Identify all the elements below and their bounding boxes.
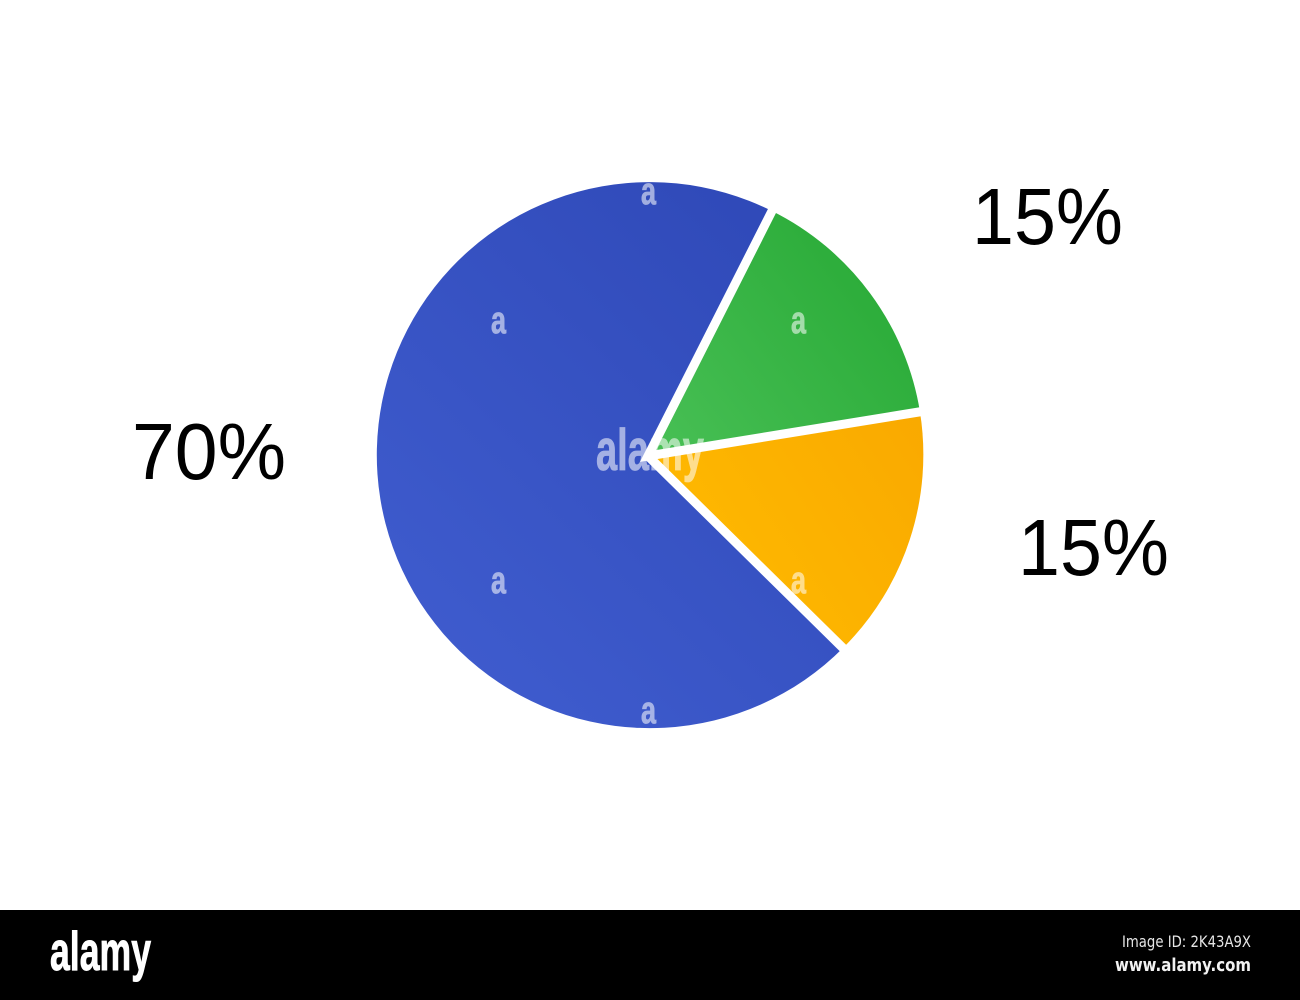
slice separators <box>648 207 925 652</box>
watermark <box>491 171 807 732</box>
pie chart <box>377 182 925 728</box>
watermark: upper right mark: a <box>791 300 807 342</box>
footer bar <box>0 910 1300 1000</box>
watermark: top mark: a <box>641 171 657 213</box>
watermark: center logo: alamy <box>596 418 704 483</box>
label: 70%: 70% <box>132 407 286 496</box>
watermark: upper left mark: a <box>491 300 507 342</box>
watermark: lower right mark: a <box>791 560 807 602</box>
image id: Image ID: 2K43A9X <box>1122 932 1251 951</box>
watermark: bottom mark: a <box>641 690 657 732</box>
website: www.alamy.com <box>1115 955 1251 976</box>
watermark: lower left mark: a <box>491 560 507 602</box>
slice: green 15% <box>650 211 920 455</box>
slice: blue 70% <box>377 182 843 728</box>
label: 15% green: 15% <box>972 172 1123 261</box>
footer logo: alamy <box>50 920 151 982</box>
slice: yellow 15% <box>650 412 923 648</box>
label: 15% yellow: 15% <box>1018 503 1169 592</box>
